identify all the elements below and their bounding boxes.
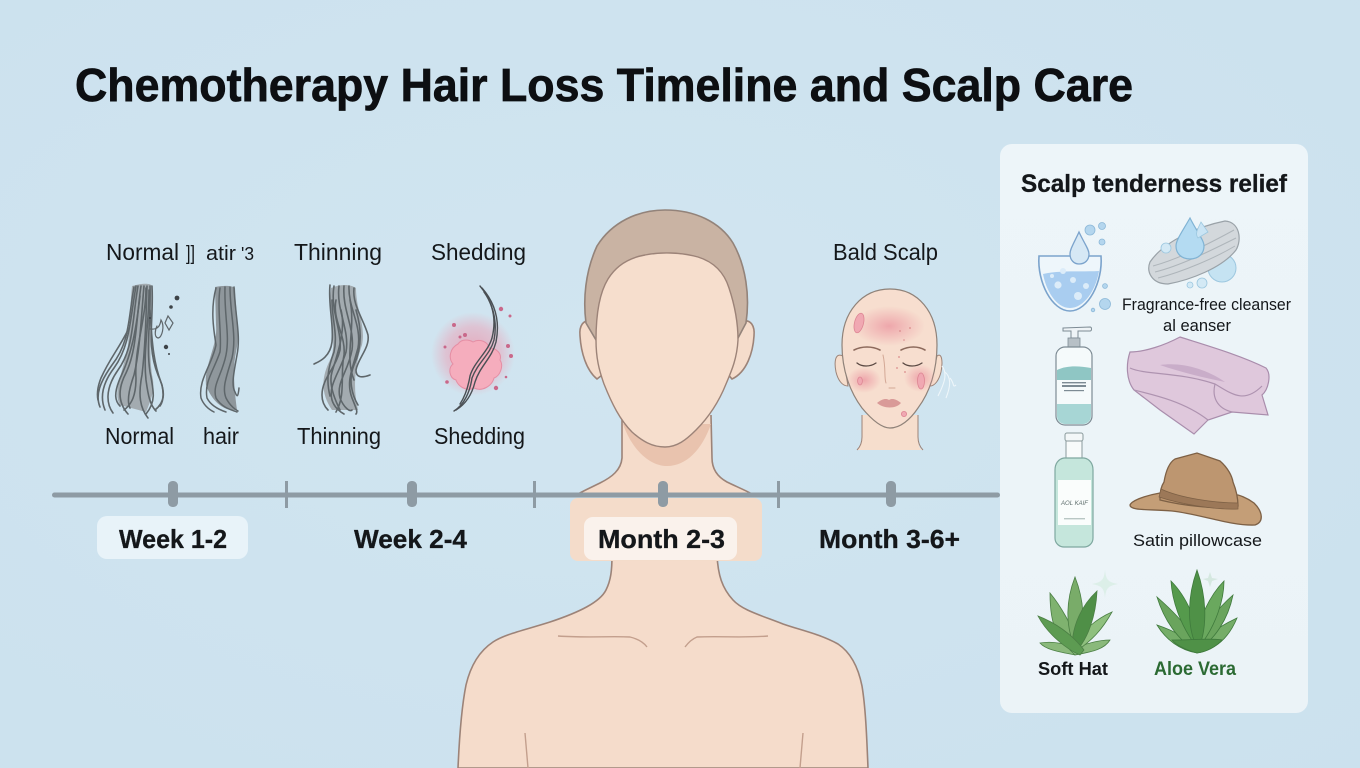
icon: aloe plant right bbox=[1157, 570, 1237, 653]
icon: aloe gel bottle bbox=[1055, 433, 1093, 547]
icon: water bowl bbox=[1039, 222, 1110, 312]
stage labels top: ]] bbox=[186, 243, 195, 265]
flaky dots bbox=[896, 327, 911, 373]
icon: pump bottle bbox=[1056, 327, 1092, 425]
spots bbox=[444, 307, 513, 390]
tingling marks bbox=[938, 366, 956, 398]
stage labels top bbox=[106, 239, 938, 265]
timeline labels bbox=[119, 524, 960, 554]
cleanser label: Fragrance-free cleanser bbox=[1122, 296, 1291, 314]
timeline labels: Month 2-3 bbox=[598, 524, 725, 554]
stage labels top: Normal bbox=[106, 239, 179, 265]
left ear bbox=[580, 321, 606, 379]
eyebrows, eyes, nose bbox=[854, 347, 925, 388]
central figure: head and shoulders bbox=[458, 210, 868, 768]
pink glow bbox=[431, 312, 515, 396]
title: Chemotherapy Hair Loss Timeline and Scalp Care bbox=[75, 59, 1133, 111]
ears bbox=[835, 355, 848, 386]
icon: aloe gel bottle: AOL KAIF bbox=[1060, 500, 1089, 507]
panel: scalp tenderness relief bbox=[1000, 144, 1308, 713]
sparkle bbox=[1092, 570, 1118, 598]
icon: bald scalp face bbox=[835, 289, 956, 450]
highlight block behind month 2-3 bbox=[570, 498, 762, 561]
icon: aloe plant left bbox=[1038, 570, 1118, 655]
lower neck and shoulders bbox=[458, 555, 868, 768]
label pill: week 1-2 bbox=[97, 516, 248, 559]
icon: folded soft towel bbox=[1127, 337, 1269, 434]
icon: soft hat bbox=[1130, 453, 1261, 525]
timeline labels: Month 3-6+ bbox=[819, 524, 960, 554]
panel heading: Scalp tenderness relief bbox=[1021, 170, 1288, 198]
soft hat label: Soft Hat bbox=[1038, 659, 1108, 679]
collar bones and arm creases bbox=[525, 636, 803, 768]
cleanser label: al eanser bbox=[1163, 317, 1231, 335]
lips bbox=[877, 399, 901, 408]
stage labels bottom: Shedding bbox=[434, 423, 525, 449]
upper neck bbox=[578, 415, 752, 494]
right ear bbox=[726, 321, 754, 379]
lesions bbox=[852, 312, 924, 417]
icon: wet cloth with droplets bbox=[1149, 218, 1239, 288]
timeline labels: Week 2-4 bbox=[354, 524, 468, 554]
major ticks bbox=[168, 481, 896, 507]
face bbox=[596, 253, 738, 447]
label pill: month 2-3 bbox=[584, 517, 737, 560]
hair cap bbox=[585, 210, 747, 340]
neck bbox=[857, 415, 922, 450]
stage labels bottom: Normal bbox=[105, 423, 174, 449]
aloe vera label: Aloe Vera bbox=[1154, 659, 1236, 680]
icon: normal hair left strands bbox=[97, 284, 179, 418]
irritated follicle cluster bbox=[450, 340, 502, 389]
stage labels bottom: Thinning bbox=[297, 423, 381, 449]
redness bbox=[853, 306, 925, 346]
satin pillowcase label: Satin pillowcase bbox=[1133, 531, 1262, 550]
icon: thinning hair strands bbox=[314, 285, 370, 414]
cleanser label bbox=[1122, 296, 1291, 335]
chin shadow bbox=[623, 424, 711, 466]
stage labels top: Shedding bbox=[431, 239, 526, 265]
stage labels top: Bald Scalp bbox=[833, 239, 938, 265]
icon: shedding scalp irritation bbox=[431, 286, 515, 411]
stage labels top: Thinning bbox=[294, 239, 382, 265]
timeline labels: Week 1-2 bbox=[119, 524, 227, 554]
stage labels bottom bbox=[105, 423, 525, 449]
stage labels bottom: hair bbox=[203, 423, 239, 449]
minor ticks bbox=[285, 481, 780, 508]
timeline axis bbox=[52, 481, 1000, 508]
bald head bbox=[842, 289, 937, 428]
stage labels top: atir bbox=[206, 243, 236, 265]
stage labels top: '3 bbox=[241, 244, 254, 264]
icon: normal hair right strands bbox=[201, 286, 239, 412]
falling hair strands bbox=[454, 286, 497, 411]
